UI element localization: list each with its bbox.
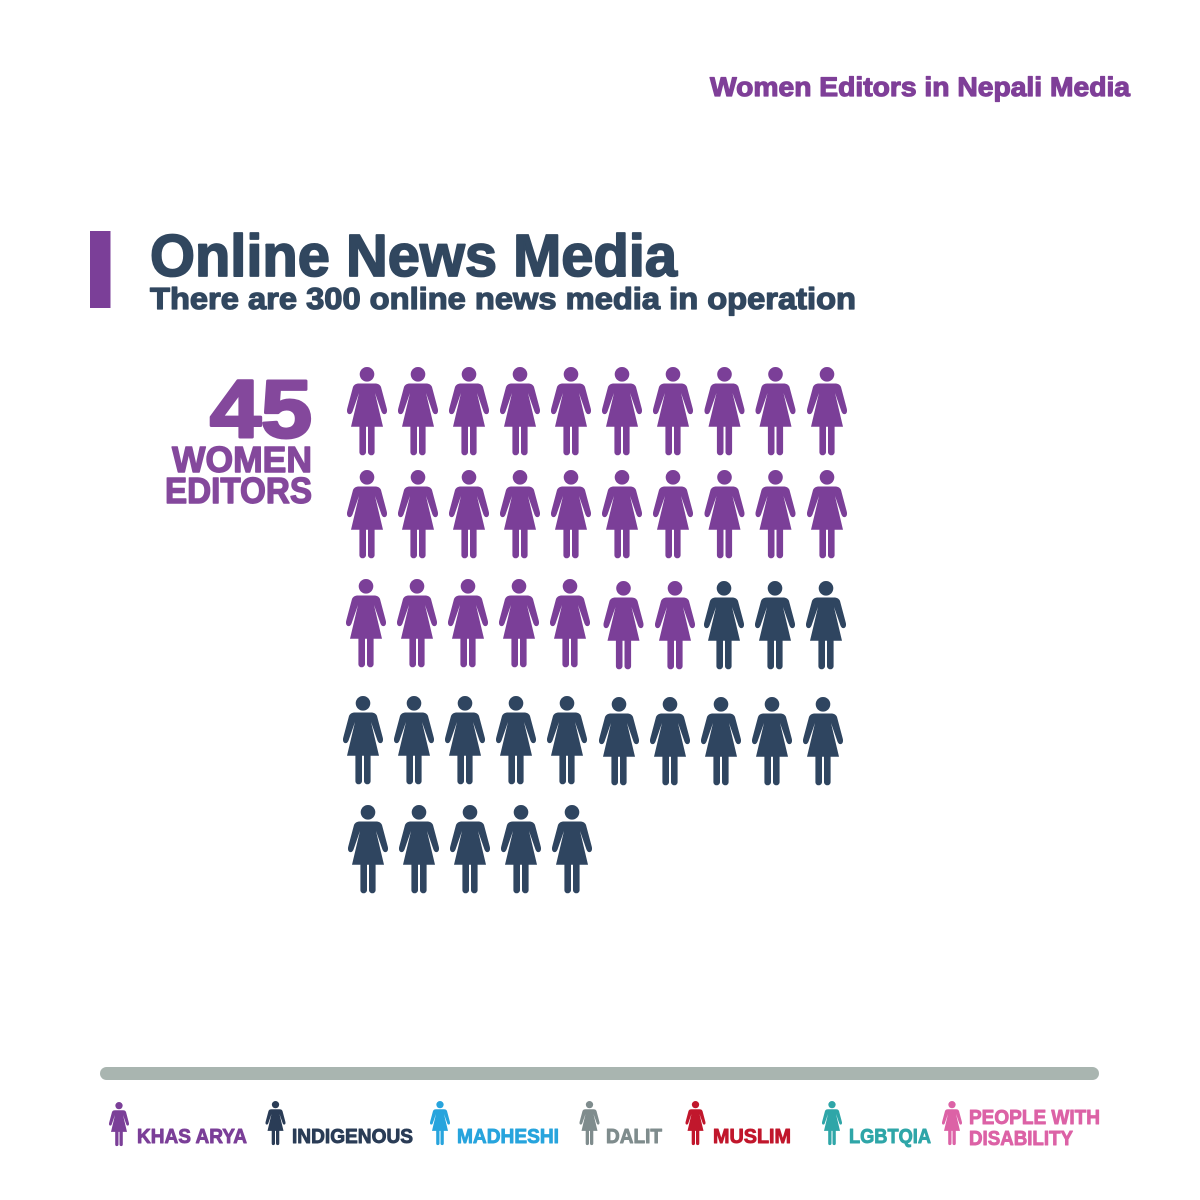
row 1: khas arya [347,367,847,455]
row 5: indigenous [348,805,592,893]
legend item: muslim: MUSLIM [713,1126,791,1148]
legend item: madheshi: MADHESHI [457,1126,559,1148]
header label: Women Editors in Nepali Media [710,72,1131,102]
callout: 45 women editors [165,364,312,511]
legend item: madheshi [430,1101,559,1148]
row 4: indigenous [343,696,843,785]
legend divider [100,1067,1099,1080]
legend item: muslim [685,1101,791,1148]
legend item: indigenous: INDIGENOUS [292,1126,413,1148]
legend [109,1101,1100,1150]
legend item: dalit: DALIT [606,1126,662,1148]
accent bar [90,231,110,308]
legend item: people with disability: PEOPLE WITH [969,1107,1100,1129]
legend item: lgbtqia [822,1101,931,1148]
legend item: khas arya: KHAS ARYA [137,1126,247,1148]
label women: WOMEN [172,439,312,480]
title: Online News Media [150,223,678,289]
legend item: people with disability [942,1101,1100,1150]
legend item: khas arya [109,1102,247,1148]
legend item: people with disability: DISABILITY [969,1128,1074,1150]
label editors: EDITORS [165,470,312,511]
row 3: indigenous [704,581,846,669]
legend item: dalit [579,1101,662,1148]
subtitle: There are 300 online news media in operation [150,281,856,316]
row 3: khas arya [346,579,695,669]
legend item: lgbtqia: LGBTQIA [849,1126,931,1148]
pictogram chart: 45 women editors [343,367,847,893]
row 2: khas arya [347,470,847,558]
number 45: 45 [210,364,312,455]
legend item: indigenous [265,1101,413,1148]
